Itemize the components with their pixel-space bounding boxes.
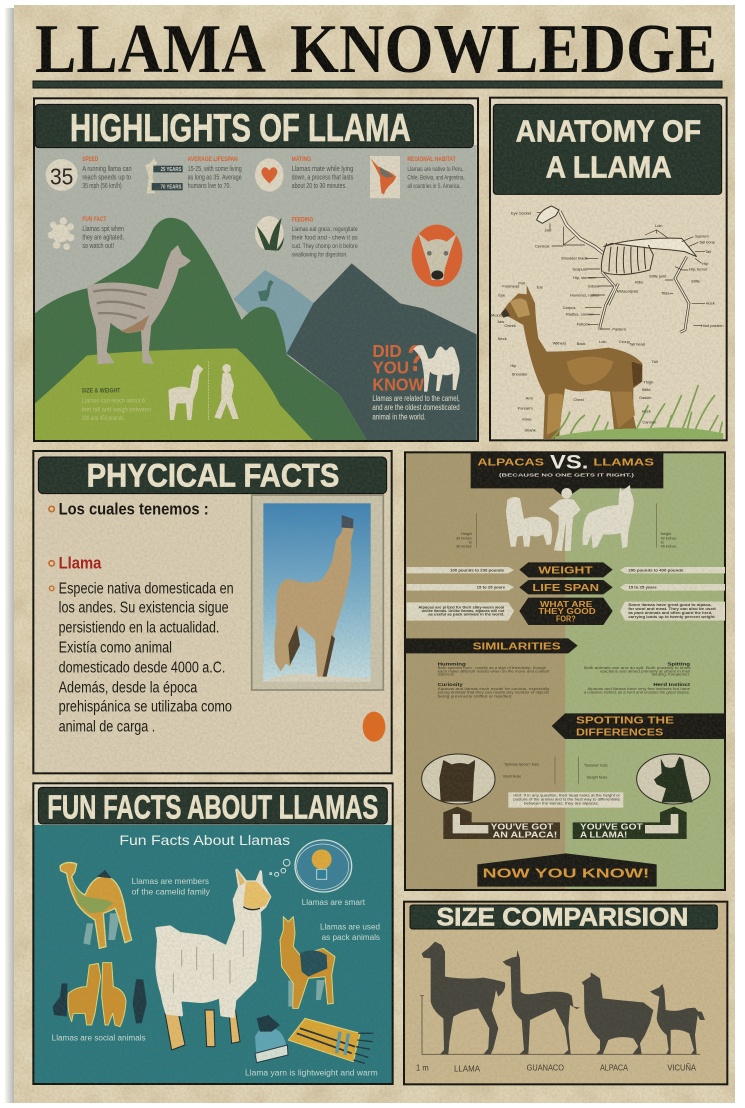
llama labels: Arm — [526, 396, 534, 401]
head notes: Sleight Nose — [587, 776, 607, 780]
llama labels: Back — [577, 341, 586, 346]
panel: anatomy of a llama — [490, 98, 727, 440]
scale axis — [420, 995, 700, 1054]
panel: fun facts about llamas — [33, 783, 393, 1084]
weight row: 200 pounds to 400 pounds — [628, 568, 684, 573]
height notes — [456, 503, 676, 549]
llama labels: Neck — [498, 336, 507, 341]
llama result sign: YOU'VE GOT — [580, 823, 643, 832]
silhouette: llama — [422, 942, 505, 1054]
fun fact stat: so watch out! — [82, 243, 114, 250]
size background — [404, 902, 727, 1084]
did you know callout: and are the oldest domesticated — [372, 403, 460, 412]
did you know callout — [372, 337, 460, 421]
llama labels: Cheek — [504, 323, 516, 328]
skeleton labels: Hip, femur — [689, 266, 708, 271]
text: camelid family: Llamas are members — [132, 877, 209, 886]
similarity notes: a massive instinct as a herd and crosses the great slopes. — [584, 691, 690, 695]
mating stat — [255, 156, 354, 192]
llama labels: Withers — [553, 340, 566, 345]
similarity notes: each make different noises when on the move and content — [438, 669, 549, 673]
llama labels: Forehead — [502, 284, 519, 289]
habitat stat with map: Chile, Bolivia, and Argentina, — [407, 174, 465, 181]
similarity notes — [438, 661, 692, 698]
heading: anatomy: ANATOMY OF — [516, 115, 701, 149]
height notes: 36 inches — [456, 545, 472, 549]
body text — [49, 580, 234, 736]
similarity notes: Alpacas and llamas each model for curious, especially — [438, 687, 550, 691]
did you know callout: ? — [407, 337, 424, 379]
speed stat: A running llama can — [82, 166, 132, 173]
life span row: 15 to 25 years — [628, 585, 657, 590]
skeleton labels: Hock — [706, 300, 715, 305]
feeding stat: cud. They chomp on it before — [292, 243, 358, 250]
skeleton labels: Stifle — [691, 278, 701, 283]
lifespan stat: 25 YEARS — [161, 167, 182, 173]
weight row: 100 pounds to 200 pounds — [450, 568, 505, 573]
skeleton labels: Tail — [705, 249, 711, 254]
text: yarn: Llama yarn is lightweight and warm — [245, 1068, 378, 1077]
body text: Además, desde la época — [59, 679, 198, 696]
llama labels: Cannon — [642, 420, 656, 425]
llama photo — [88, 246, 190, 364]
feeding stat: their food and - chew it as — [292, 234, 358, 241]
icon: llama and human scale — [168, 362, 239, 420]
icon: big white llama — [157, 870, 271, 1050]
similarity notes: reactions and aimed primarily at others in their — [600, 669, 692, 673]
mating stat: Llamas mate while lying — [292, 166, 353, 173]
small llama on peak — [258, 280, 274, 301]
heading: anatomy — [493, 104, 722, 194]
similarity notes: being previously sniffed or handled. — [438, 694, 513, 698]
silhouette: alpaca — [582, 972, 653, 1054]
body text: Especie nativa domesticada en — [59, 580, 234, 597]
similarity notes: young animals that they can nearly any number of objects — [438, 691, 550, 695]
heading: physical facts: PHYCICAL FACTS — [87, 457, 339, 494]
llama labels: Shoulder — [512, 372, 528, 377]
icon: llama herd — [53, 963, 147, 1027]
speed stat: 35 mph (56 km/h) — [82, 183, 122, 190]
height notes: 42 inches — [661, 536, 676, 540]
feeding stat: swallowing for digestion. — [292, 252, 348, 259]
icon: hat — [255, 1015, 288, 1063]
head notes: Blunt Nose — [503, 775, 521, 779]
lifespan stat: 15-25, with some living — [188, 166, 242, 173]
brown llama photo — [501, 285, 642, 439]
similarity notes: related to all. — [438, 673, 454, 677]
llama result sign — [573, 807, 687, 840]
size and weight note: 280 and 450 pounds. — [82, 415, 125, 422]
llama labels: Thigh — [643, 380, 653, 385]
skeleton labels: Loin — [655, 223, 663, 228]
comparison header: (BECAUSE NO ONE GETS IT RIGHT.) — [499, 472, 635, 478]
heading: fun facts: FUN FACTS ABOUT LLAMAS — [47, 789, 378, 826]
text: pack animals — [320, 922, 380, 942]
body text: persistiendo en la actualidad. — [59, 619, 219, 636]
head notes — [503, 757, 608, 784]
now you know banner — [477, 853, 657, 887]
subtitle: Fun Facts About Llamas — [119, 832, 290, 848]
title — [35, 11, 717, 88]
good for row: unlike llamas. Unlike llamas, alpacas will not — [422, 609, 505, 613]
speed stat — [46, 156, 132, 191]
orange dot — [363, 712, 385, 742]
skeleton labels: Elbow — [588, 283, 599, 288]
llama labels: Croup — [619, 339, 631, 344]
similarity notes: Both species hum - mostly as a sign of friendship, though — [438, 666, 546, 670]
poster shadow — [5, 8, 14, 1103]
title rule — [33, 81, 722, 88]
head notes: "Banana" Ears — [584, 764, 608, 768]
fun fact stat: FUN FACT — [82, 216, 106, 223]
head notes: "Spinney Spoon" Ears — [503, 763, 539, 767]
similarities arrow — [405, 638, 578, 653]
weight row — [407, 562, 725, 577]
lifespan stat: as long as 35. Average — [188, 174, 242, 181]
skeleton labels: Shoulder blade — [561, 256, 589, 261]
habitat stat with map: all countries in S. America. — [407, 183, 461, 190]
llama labels: Gaskin — [639, 395, 651, 400]
llama labels: Shank — [524, 428, 536, 433]
habitat stat with map — [370, 156, 465, 198]
icon: blanket — [288, 1018, 373, 1063]
title: LLAMA — [35, 11, 266, 88]
fun fact stat: Llamas spit when — [82, 226, 124, 233]
speed stat: 35 — [50, 163, 73, 189]
comparison header: ALPACAS — [477, 458, 544, 469]
similarity notes: Humming — [438, 661, 466, 667]
note box: Hint: If in any question, their head looks at the height or — [513, 794, 621, 798]
lifespan stat: humans live to 70. — [188, 183, 231, 190]
panel: highlights of llama — [34, 98, 478, 441]
weight row: WEIGHT — [538, 566, 594, 577]
skeleton labels: Pastern — [612, 326, 626, 331]
text: pack animals: Llamas are used — [320, 922, 380, 931]
llama labels: Chest — [573, 397, 585, 402]
silhouette: vicuna — [650, 984, 705, 1054]
grass — [552, 385, 723, 439]
skeleton labels: Hind pastern — [701, 323, 724, 328]
llama head oval — [637, 754, 710, 804]
mountains — [35, 218, 477, 440]
llama labels: Jaw — [497, 319, 504, 324]
good for row: for wool and meat. They can also be used — [628, 607, 716, 611]
icon: pack llama — [280, 917, 335, 1008]
good for row: FOR? — [556, 615, 576, 624]
good for row: as pack animals and often guard the herd, — [628, 611, 712, 615]
good for row: carrying loads up to twenty percent weight. — [628, 615, 716, 619]
heading: anatomy: A LLAMA — [546, 151, 672, 185]
icon: camel — [413, 345, 460, 392]
did you know callout: Llamas are related to the camel, — [372, 394, 460, 403]
axis labels: ALPACA — [600, 1064, 629, 1073]
axis labels: VICUÑA — [667, 1064, 697, 1073]
text: social animals: Llamas are social animals — [52, 1034, 146, 1043]
good for row: WHAT ARE — [540, 600, 593, 609]
skeleton diagram — [537, 206, 705, 332]
silhouette: guanaco — [503, 950, 580, 1054]
height notes: Height — [461, 532, 472, 536]
size and weight note: SIZE & WEIGHT — [82, 388, 120, 395]
body text: los andes. Su existencia sigue — [59, 599, 229, 616]
icon: alpaca head — [412, 225, 462, 287]
similarity notes: Curiosity — [438, 682, 463, 688]
skeleton labels: Scapula — [572, 266, 588, 271]
height notes: to — [469, 541, 472, 545]
mating stat: MATING — [292, 156, 311, 163]
text: camelid family — [132, 877, 210, 897]
speed stat: reach speeds up to — [82, 174, 131, 181]
llama labels: Muzzle — [491, 312, 504, 317]
llama labels: Tail head — [629, 342, 645, 347]
skeleton labels: Hip, sternum — [573, 275, 596, 280]
facts background — [33, 451, 392, 773]
speed stat: SPEED — [82, 156, 98, 163]
llama labels: Hip — [510, 363, 517, 368]
good for row: as useful as pack animals in the world. — [428, 613, 504, 617]
alpaca result sign — [443, 807, 560, 840]
alpaca result sign: AN ALPACA! — [493, 831, 557, 840]
llama labels: Knee — [522, 416, 532, 421]
comparison header — [471, 452, 663, 498]
skeleton labels: Hip — [702, 261, 709, 266]
llama labels: Forearm — [518, 406, 533, 411]
good for row: Alpacas are prized for their silky-warm wool — [418, 605, 504, 609]
skeleton labels: Humerus, radius — [570, 292, 599, 297]
llama labels: Poll — [518, 280, 525, 285]
body text: Existía como animal — [59, 639, 172, 656]
life span row — [407, 580, 725, 594]
life span row: 15 to 25 years — [477, 585, 506, 590]
alpaca head oval — [422, 754, 495, 804]
body text: domesticado desde 4000 a.C. — [59, 659, 225, 676]
icon: thought bubble with bulb — [270, 840, 352, 892]
similarity notes: Herd Instinct — [653, 682, 690, 688]
body text: prehispánica se utilizaba como — [59, 699, 232, 716]
alpaca result sign: YOU'VE GOT — [491, 823, 553, 832]
size and weight note: feet tall and weigh between — [82, 406, 151, 413]
height notes: to — [661, 541, 664, 545]
skeleton labels: Stifle joint — [649, 274, 667, 279]
cream heading strip — [34, 784, 392, 825]
axis labels: 1 m — [416, 1064, 429, 1073]
note box — [508, 792, 623, 808]
framed llama photo — [252, 495, 383, 690]
spotting the differences arrow: SPOTTING THE — [576, 716, 674, 727]
good for row: THEY GOOD — [538, 607, 596, 616]
similarity notes: Spitting — [667, 661, 690, 667]
llama labels: Tail — [652, 359, 658, 364]
skeleton labels: Carpus — [563, 305, 576, 310]
did you know callout: KNOW — [372, 374, 424, 394]
similarities arrow: SIMILARITIES — [473, 641, 561, 652]
axis labels — [416, 1064, 697, 1073]
scene background — [34, 98, 478, 441]
mating stat: about 20 to 30 minutes. — [292, 183, 347, 190]
heading: highlights: HIGHLIGHTS OF LLAMA — [70, 106, 411, 150]
skeleton labels: Metacarpals — [617, 288, 638, 293]
comparison header: VS. — [550, 452, 588, 473]
spotting the differences arrow — [552, 713, 725, 739]
habitat stat with map: Llamas are native to Peru, — [407, 166, 463, 173]
llama result sign: A LLAMA! — [580, 831, 627, 840]
height notes: 46 inches — [661, 545, 676, 549]
split background — [405, 452, 725, 890]
skeleton labels: Ribs — [635, 280, 643, 285]
bullet: llama: Llama — [59, 553, 102, 572]
mating stat: down, a process that lasts — [292, 174, 354, 181]
skeleton labels: Eye Socket — [511, 210, 532, 215]
heading: fun facts — [38, 787, 387, 826]
panel: alpacas vs llamas — [405, 452, 725, 890]
axis labels: GUANACO — [527, 1064, 564, 1073]
fun facts background — [33, 783, 393, 1084]
feeding stat — [255, 216, 358, 259]
text: pack animals: as pack animals — [322, 933, 380, 942]
llama labels: Hock — [642, 408, 651, 413]
icon: camel — [60, 862, 132, 948]
heading: size comparison: SIZE COMPARISION — [437, 905, 688, 932]
text: smart: Llamas are smart — [302, 898, 366, 907]
alpaca, man and llama silhouettes — [506, 485, 634, 551]
life span row: LIFE SPAN — [532, 583, 599, 594]
body text: animal de carga . — [59, 719, 155, 736]
skeleton labels: Jaw — [544, 228, 552, 233]
height notes: 34 inches — [456, 536, 472, 540]
anatomy background — [490, 98, 727, 440]
llama labels: Loin — [599, 339, 607, 344]
note box: between the llamas, they are alpacas. — [524, 802, 599, 806]
panel: physical facts — [33, 451, 392, 773]
similarity notes: feeding, threatened. — [652, 673, 690, 677]
lifespan stat: AVERAGE LIFESPAN — [188, 156, 238, 163]
skeleton labels — [511, 210, 724, 331]
feeding stat: FEEDING — [292, 217, 313, 224]
llama labels: Stifle — [642, 387, 651, 392]
lifespan stat: 70 YEARS — [161, 185, 182, 191]
similarity notes: Both animals can and do spit. Both possibly to show — [584, 666, 691, 670]
skeleton labels: Cervical — [535, 244, 550, 249]
comparison header: LLAMAS — [593, 458, 654, 469]
text: camelid family: of the camelid family — [132, 888, 210, 897]
spotting the differences arrow: DIFFERENCES — [576, 728, 663, 739]
bullet heading: Los cuales tenemos : — [59, 499, 209, 518]
fun fact stat: they are agitated, — [82, 234, 124, 241]
fun fact stat — [48, 216, 124, 250]
feeding stat: Llamas eat grass, regurgitate — [292, 226, 358, 233]
similarity notes: Alpacas and llamas have very few instincts but have — [587, 687, 690, 691]
size and weight note — [82, 388, 151, 422]
skeleton labels: Tail bone — [699, 240, 716, 245]
did you know callout: DID — [372, 341, 402, 361]
llama labels: Eye — [498, 293, 506, 298]
habitat stat with map: REGIONAL HABITAT — [407, 156, 456, 163]
lifespan stat — [145, 156, 242, 193]
axis labels: LLAMA — [454, 1064, 481, 1073]
skeleton labels: Tibia — [661, 290, 670, 295]
note box: posture of the animal and is the best way to differentiate — [513, 798, 620, 802]
llama labels — [491, 280, 658, 433]
did you know callout: YOU — [372, 358, 409, 378]
good for row — [407, 598, 725, 625]
llama labels: Ear — [537, 284, 544, 289]
panel: size comparison — [404, 902, 727, 1084]
size and weight note: Llamas can reach about 6 — [82, 398, 145, 405]
skeleton labels: Fetlock — [577, 322, 590, 327]
good for row: Some llamas have great good to alpaca, — [628, 603, 712, 607]
height notes: Height — [661, 532, 671, 536]
skeleton labels: Sacrum — [695, 234, 709, 239]
now you know banner: NOW YOU KNOW! — [483, 866, 649, 880]
did you know callout: animal in the world. — [372, 412, 426, 421]
skeleton labels: Radius, cannon — [566, 312, 594, 317]
